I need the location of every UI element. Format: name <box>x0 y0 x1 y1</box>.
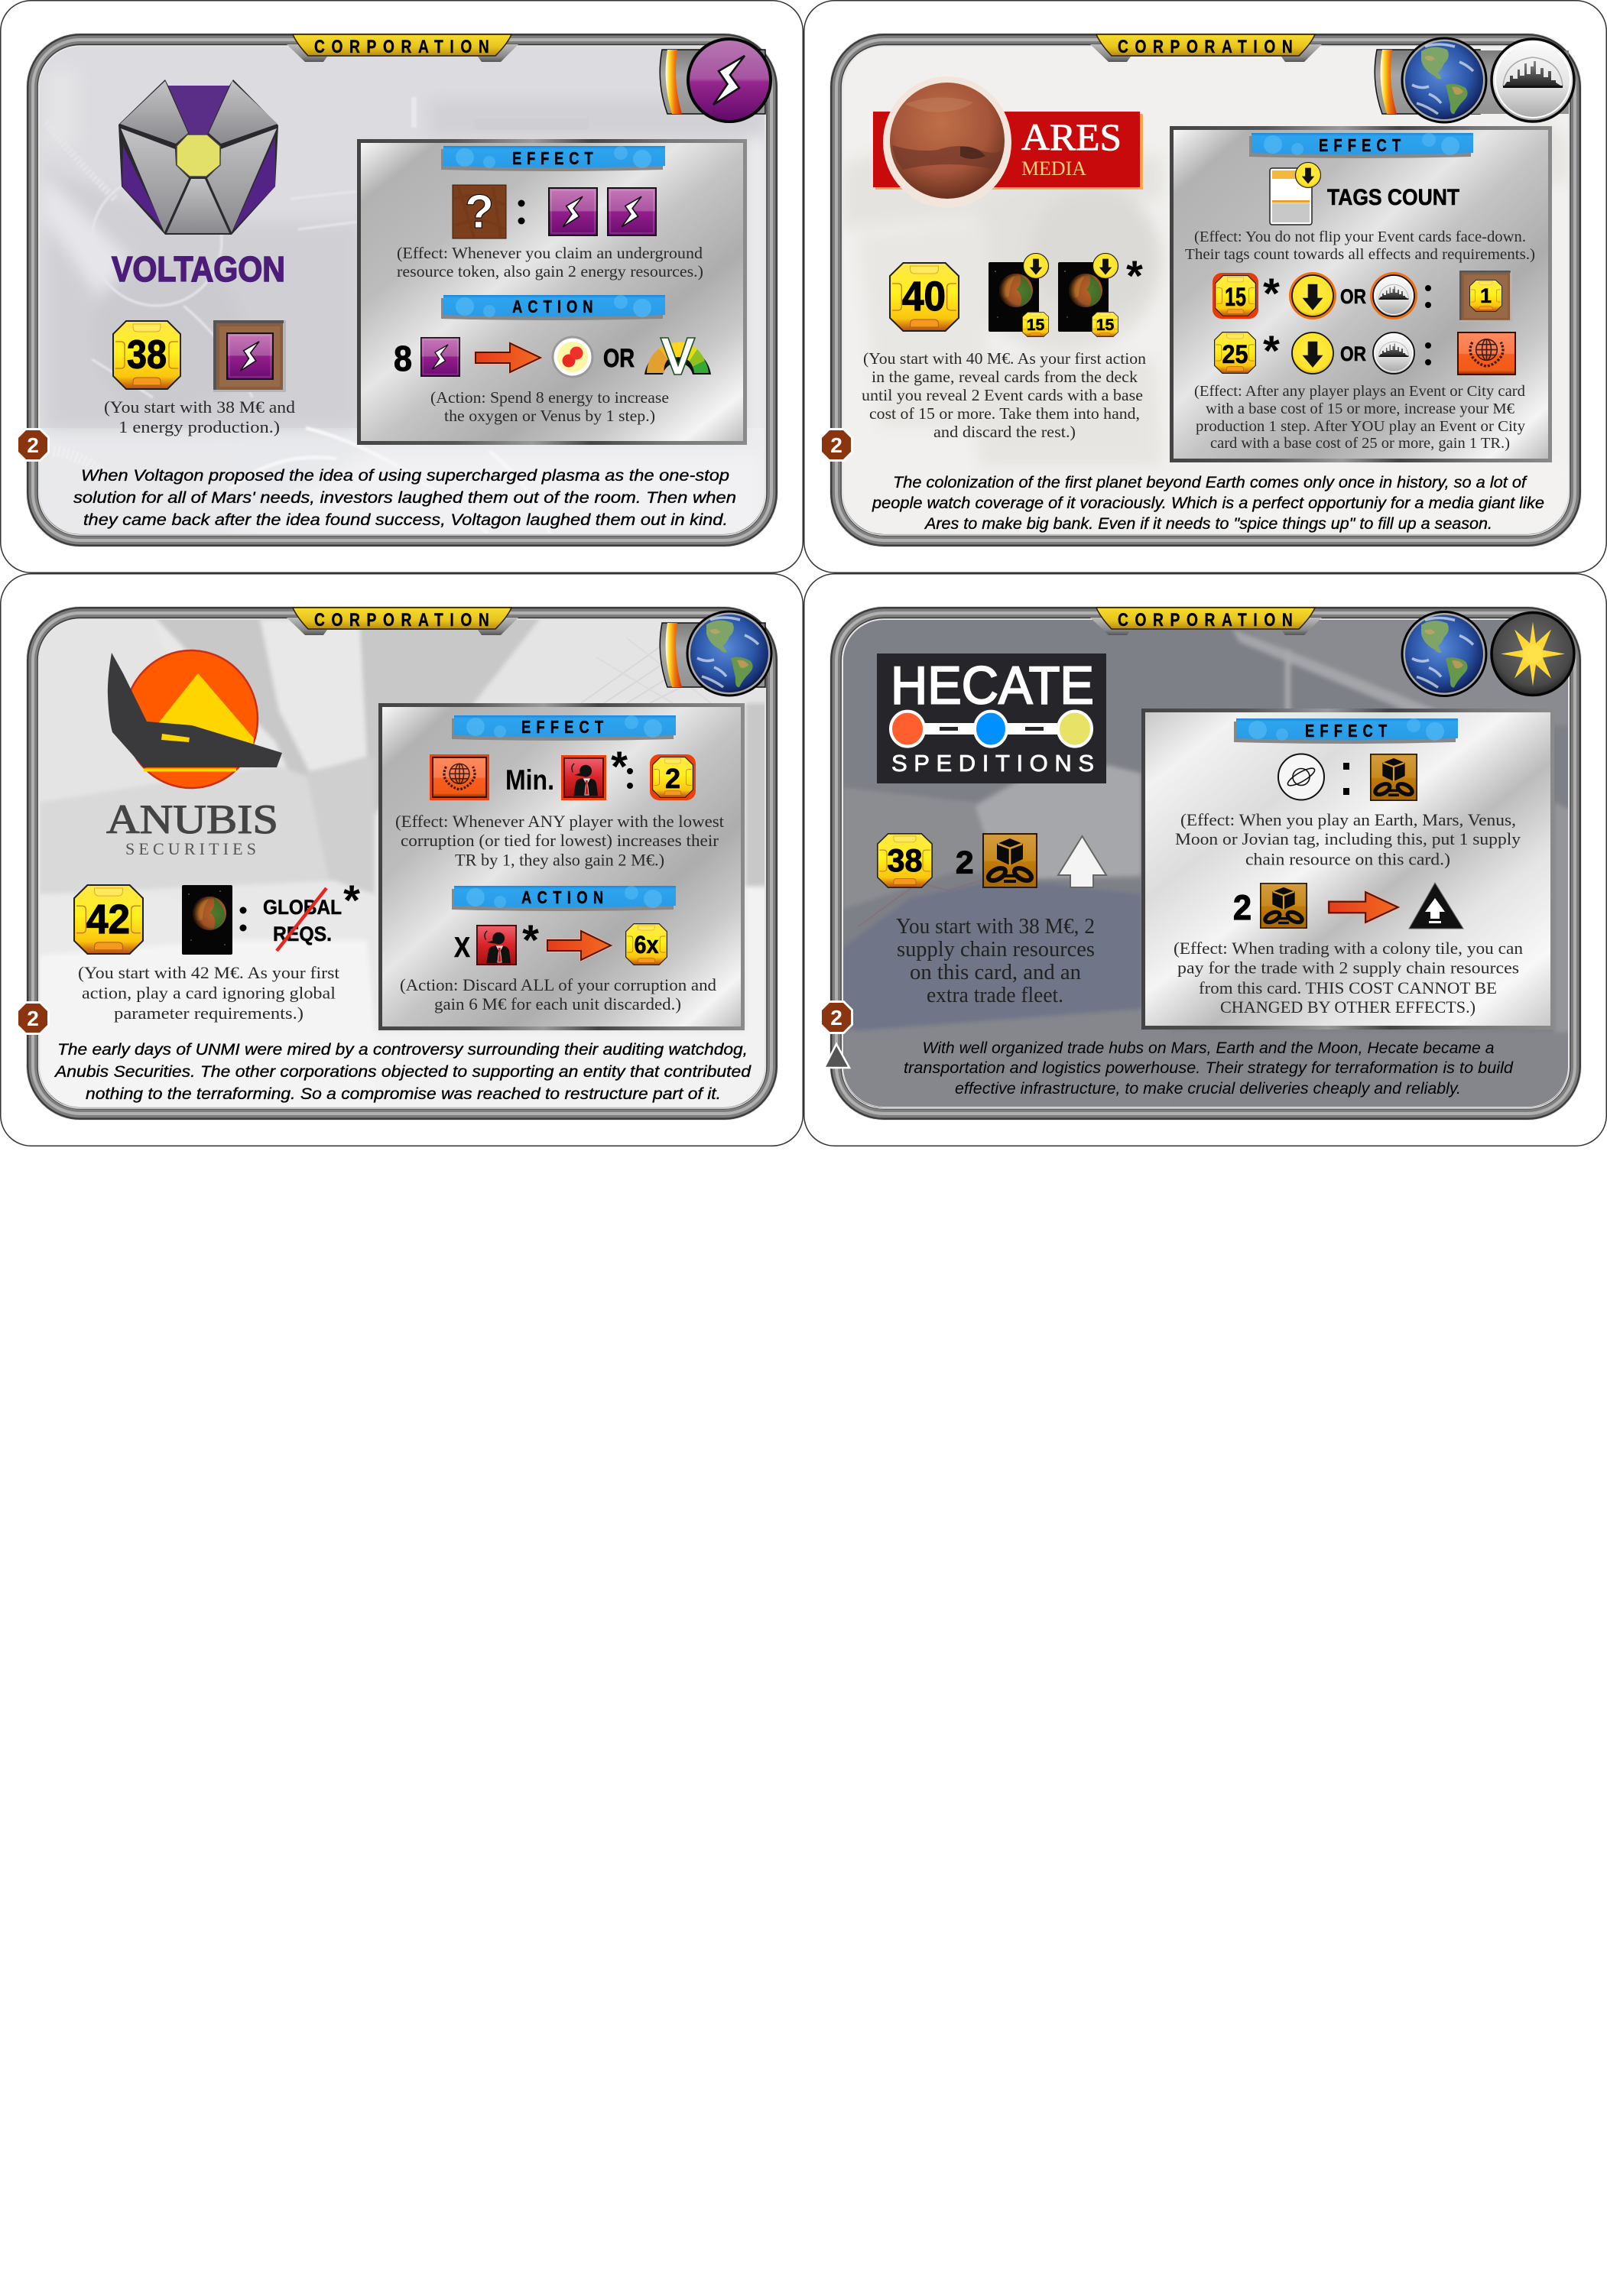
action cost: 8 energy: 8 <box>394 339 412 378</box>
background image: machinery <box>31 38 772 543</box>
action cost: X corruption: X <box>454 932 470 963</box>
row: 15 cost trigger: 15 <box>1225 283 1246 312</box>
icon: Venus gauge <box>644 338 711 375</box>
action text: (Action: Spend 8 energy to increase <box>430 388 669 407</box>
starting megacredits: 42 <box>74 885 143 954</box>
title: ANUBIS: ANUBIS <box>106 796 278 842</box>
cost: 2 supply: 2 <box>1233 888 1252 927</box>
effect text: chain resource on this card.) <box>1245 850 1450 868</box>
row: 25 cost trigger <box>1215 326 1431 375</box>
flavor text <box>872 474 1544 533</box>
starting text: until you reveal 2 Event cards with a base <box>862 386 1143 404</box>
flavor text: people watch coverage of it voraciously. Which is a perfect opportuniy for a media giant like <box>872 495 1544 512</box>
reward: 2 M€: 2 <box>665 763 680 794</box>
effect header: EFFECT <box>1319 136 1401 156</box>
reward: M€ production: 1 <box>1480 284 1492 307</box>
badge: 2 <box>820 1000 853 1034</box>
event cards revealed: 15 <box>1027 316 1044 334</box>
tags count heading: TAGS COUNT <box>1327 185 1459 210</box>
effect text: corruption (or tied for lowest) increases their <box>401 831 719 850</box>
action header: ACTION <box>521 888 603 908</box>
action text <box>400 975 716 1013</box>
title: VOLTAGON: VOLTAGON <box>112 249 285 289</box>
row: 15 cost trigger: * <box>1263 269 1280 317</box>
icon: energy resources <box>549 188 656 235</box>
panel: effects <box>1141 709 1554 1030</box>
global requirements crossed out: REQS. <box>273 923 332 945</box>
frame <box>836 608 1575 1114</box>
OR: OR <box>603 344 635 373</box>
logo: Ares Media: ARES <box>1021 115 1122 158</box>
effect text: Moon or Jovian tag, including this, put 1 supply <box>1175 829 1521 848</box>
colon <box>627 768 633 789</box>
effect text 2: from this card. THIS COST CANNOT BE <box>1199 978 1497 997</box>
effect text <box>1185 229 1535 263</box>
supply chain resources: 2: 2 <box>956 844 974 880</box>
effect text: (Effect: You do not flip your Event cards face-down. <box>1194 229 1526 245</box>
starting megacredits: 38 <box>113 321 180 389</box>
starting text <box>104 397 295 436</box>
starting megacredits: 38: 38 <box>887 842 922 878</box>
flavor text: transportation and logistics powerhouse. Their strategy for terraformation is to build <box>904 1059 1514 1077</box>
reward: 2 M€ <box>650 754 696 800</box>
reward: M€ production <box>1459 271 1512 322</box>
card: Anubis Securities <box>1 574 803 1146</box>
tag: earth <box>1402 611 1486 696</box>
badge: 2 <box>820 428 853 462</box>
arrow <box>476 343 541 372</box>
icon: wild planet tag <box>1278 754 1324 799</box>
logo: Hecate Speditions: HECATE <box>891 656 1094 715</box>
effect text 2 <box>1194 383 1525 452</box>
starting text <box>862 349 1147 441</box>
starting megacredits: 38: 38 <box>127 333 167 378</box>
effect text <box>395 812 724 870</box>
flavor text <box>73 467 736 529</box>
reward: terraform rating <box>1458 332 1515 375</box>
effect text: Their tags count towards all effects and requirements.) <box>1185 246 1535 263</box>
starting megacredits: 40: 40 <box>902 274 946 319</box>
effect text 2: (Effect: When trading with a colony tile, you can <box>1174 939 1523 958</box>
effect text: (Effect: Whenever ANY player with the lowest <box>395 812 724 831</box>
supply chain resources: 2 <box>956 834 1037 887</box>
reward: 6x M€ <box>626 924 667 965</box>
asterisk: * <box>522 916 539 964</box>
badge: 2: 2 <box>27 1007 39 1030</box>
logo: Hecate Speditions: SPEDITIONS <box>891 750 1094 777</box>
panel: effect and action <box>378 703 745 1030</box>
event cards revealed: 15 <box>1096 316 1114 334</box>
flavor text <box>54 1041 752 1103</box>
banner label: CORPORATION <box>1118 609 1293 631</box>
logo: Voltagon emblem <box>118 79 278 235</box>
flavor text <box>904 1039 1514 1098</box>
global requirements crossed out <box>263 888 342 951</box>
card base <box>1 1 803 572</box>
logo: Ares Media: MEDIA <box>1021 157 1086 180</box>
row: 25 cost trigger: 25 <box>1222 340 1248 369</box>
icon: supply chain <box>1371 754 1417 800</box>
banner label: CORPORATION <box>314 609 489 631</box>
effect text <box>1175 810 1521 868</box>
icon: trade fleet <box>1409 883 1463 929</box>
card: Ares Media <box>804 1 1606 572</box>
tag: earth <box>687 611 771 696</box>
starting text: (You start with 42 M€. As your first <box>78 963 339 982</box>
effect text 2: card with a base cost of 25 or more, gain 1 TR.) <box>1210 435 1510 452</box>
badge: trade triangle <box>824 1044 849 1068</box>
tag holder <box>1375 50 1569 114</box>
effect header: EFFECT <box>512 149 593 169</box>
banner label: CORPORATION <box>1118 36 1293 57</box>
starting text: in the game, reveal cards from the deck <box>872 368 1138 386</box>
energy production <box>213 320 286 392</box>
card: Voltagon <box>1 1 803 572</box>
tag: city <box>1492 39 1574 122</box>
effect text <box>397 244 703 281</box>
frame <box>33 608 771 1114</box>
cost: 2 supply <box>1233 884 1307 928</box>
card: Hecate Speditions <box>804 574 1606 1146</box>
icon: oxygen <box>553 337 592 377</box>
starting text <box>896 915 1095 1007</box>
action header <box>452 886 676 911</box>
icon: trade fleet arrow <box>1058 836 1106 887</box>
icon: corruption <box>561 755 606 800</box>
flavor text: With well organized trade hubs on Mars, Earth and the Moon, Hecate became a <box>922 1039 1494 1057</box>
starting text: extra trade fleet. <box>927 984 1063 1007</box>
frame <box>836 34 1575 540</box>
effect text 2: pay for the trade with 2 supply chain resources <box>1177 958 1519 977</box>
flavor text: The colonization of the first planet beyond Earth comes only once in history, so a lot of <box>893 474 1527 491</box>
card base <box>1 574 803 1146</box>
flavor text: When Voltagon proposed the idea of using supercharged plasma as the one-stop <box>81 467 729 485</box>
arrow <box>1329 892 1398 923</box>
action text: gain 6 M€ for each unit discarded.) <box>434 994 681 1013</box>
starting text: parameter requirements.) <box>114 1004 304 1023</box>
action header: ACTION <box>512 297 593 317</box>
logo: Hecate Speditions <box>877 653 1106 783</box>
colon <box>240 906 246 931</box>
global requirements crossed out: GLOBAL <box>263 896 342 919</box>
action cost: X corruption <box>454 926 516 965</box>
starting text: cost of 15 or more. Take them into hand, <box>869 404 1140 423</box>
asterisk: * <box>1126 251 1143 300</box>
effect text 2: with a base cost of 15 or more, increase your M€ <box>1206 401 1514 417</box>
effect header <box>441 146 665 171</box>
tag: earth <box>1402 38 1486 122</box>
effect header <box>1249 133 1473 158</box>
badge: 2: 2 <box>830 433 842 457</box>
effect header: EFFECT <box>1305 722 1387 741</box>
logo: Ares Media <box>873 76 1143 208</box>
badge: 2 <box>16 428 50 462</box>
logo: Anubis emblem <box>108 650 282 788</box>
subtitle: SECURITIES: SECURITIES <box>125 839 256 858</box>
effect header <box>452 715 676 741</box>
icon: underground token: ? <box>465 186 494 238</box>
colon <box>518 200 524 225</box>
badge: 2 <box>16 1001 50 1035</box>
tag holder <box>660 623 765 687</box>
starting text <box>78 963 339 1023</box>
starting megacredits: 38 <box>878 834 932 887</box>
effect text: TR by 1, they also gain 2 M€.) <box>455 850 664 870</box>
starting text: action, play a card ignoring global <box>82 983 336 1003</box>
badge: 2: 2 <box>27 433 39 457</box>
row: 25 cost trigger: * <box>1263 326 1280 375</box>
starting text: You start with 38 M€, 2 <box>896 915 1095 939</box>
flavor text: effective infrastructure, to make crucial deliveries cheaply and reliably. <box>955 1080 1461 1098</box>
icon: underground token <box>453 185 506 238</box>
starting megacredits: 40 <box>890 263 959 331</box>
event card <box>182 885 232 955</box>
asterisk: * <box>611 742 628 790</box>
effect text: (Effect: Whenever you claim an underground <box>397 244 703 262</box>
asterisk: * <box>343 876 360 924</box>
starting text: on this card, and an <box>910 961 1081 984</box>
panel: effect and action <box>357 139 747 445</box>
effect text 2 <box>1174 939 1523 1017</box>
reward: 6x M€: 6x <box>635 931 659 958</box>
action text <box>430 388 669 425</box>
event cards revealed <box>989 254 1118 337</box>
panel: effect <box>1170 126 1552 462</box>
action text: the oxygen or Venus by 1 step.) <box>444 407 655 425</box>
starting megacredits: 42: 42 <box>86 897 130 942</box>
row: 25 cost trigger: OR <box>1340 342 1366 365</box>
effect text: resource token, also gain 2 energy resources.) <box>397 262 703 281</box>
tag: sun <box>1492 613 1574 696</box>
flavor text: solution for all of Mars' needs, investors laughed them out of the room. Then when <box>73 489 736 507</box>
action header <box>441 295 665 320</box>
tag: energy <box>688 39 771 122</box>
background image: space station <box>834 611 1576 1116</box>
icon: terraform rating <box>430 754 489 800</box>
action text: (Action: Discard ALL of your corruption and <box>400 975 716 994</box>
icon: event card <box>1270 162 1321 225</box>
badge: 2: 2 <box>830 1006 842 1030</box>
tag holder <box>660 50 765 114</box>
arrow <box>547 931 611 960</box>
flavor text: nothing to the terraforming. So a compromise was reached to restructure part of it. <box>86 1085 721 1103</box>
effect header <box>1234 718 1458 744</box>
card base <box>804 1 1606 572</box>
flavor text: Anubis Securities. The other corporations objected to supporting an entity that contributed <box>54 1063 752 1081</box>
effect text 2: (Effect: After any player plays an Event or City card <box>1194 383 1525 400</box>
starting text: 1 energy production.) <box>118 417 280 436</box>
card base <box>804 574 1606 1146</box>
frame <box>33 34 771 540</box>
flavor text: they came back after the idea found success, Voltagon laughed them out in kind. <box>83 511 728 529</box>
effect header: EFFECT <box>521 718 603 738</box>
background image: office <box>31 611 772 1116</box>
flavor text: The early days of UNMI were mired by a controversy surrounding their auditing watchdog, <box>57 1041 748 1059</box>
action cost: 8 energy <box>394 338 459 378</box>
effect text 2: CHANGED BY OTHER EFFECTS.) <box>1220 997 1476 1017</box>
effect text: (Effect: When you play an Earth, Mars, Venus, <box>1180 810 1516 829</box>
starting text: (You start with 38 M€ and <box>104 397 295 417</box>
row: 15 cost trigger: OR <box>1340 285 1366 308</box>
colon <box>1343 763 1349 795</box>
starting text: and discard the rest.) <box>933 423 1076 441</box>
effect text 2: production 1 step. After YOU play an Event or City <box>1196 418 1525 435</box>
starting text: (You start with 40 M€. As your first action <box>863 349 1147 368</box>
background image: astronaut <box>834 38 1576 543</box>
row: 15 cost trigger <box>1213 269 1431 319</box>
label: Min.: Min. <box>505 764 554 796</box>
banner label: CORPORATION <box>314 36 489 57</box>
flavor text: Ares to make big bank. Even if it needs to "spice things up" to fill up a season. <box>924 515 1492 533</box>
starting text: supply chain resources <box>897 938 1095 962</box>
